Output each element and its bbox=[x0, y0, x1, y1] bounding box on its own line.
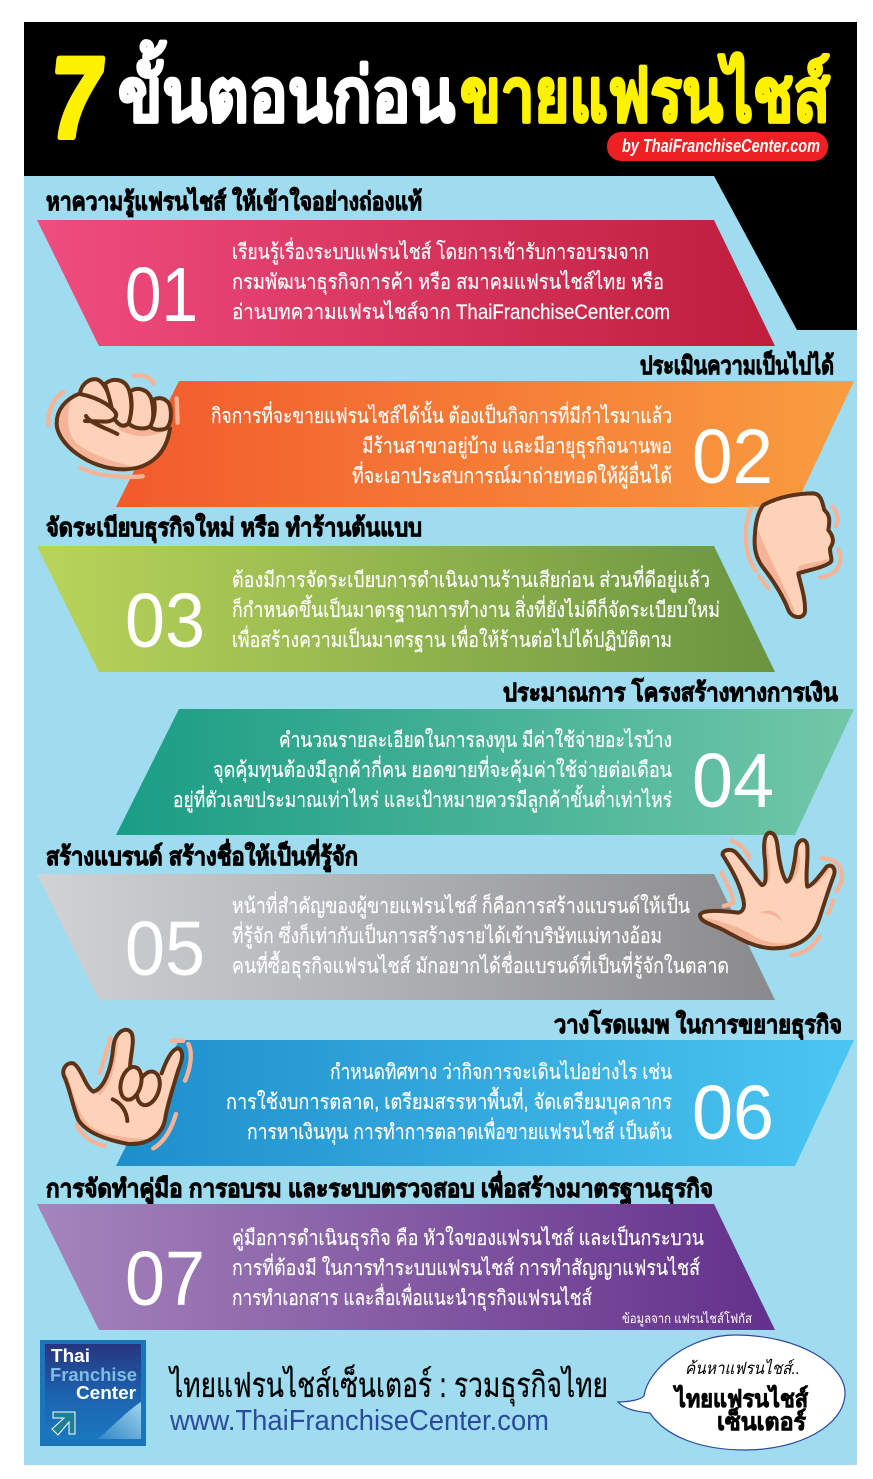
footer url: www.ThaiFranchiseCenter.com bbox=[169, 1405, 549, 1437]
panel: step 01: 01 bbox=[125, 252, 198, 338]
panel: step 01: กรมพัฒนาธุรกิจการค้า หรือ สมาคมแฟรนไชส์ไทย หรือ bbox=[232, 270, 664, 295]
speech bubble: ค้นหาแฟรนไชส์.. bbox=[685, 1358, 800, 1378]
panel: step 06: กำหนดทิศทาง ว่ากิจการจะเดินไปอย่างไร เช่น bbox=[330, 1060, 672, 1084]
logo: Franchise bbox=[50, 1365, 137, 1385]
speech bubble: เซ็นเตอร์ bbox=[717, 1407, 806, 1436]
black title panel bbox=[24, 22, 857, 330]
panel: step 05 bbox=[37, 874, 775, 1000]
speech bubble: ไทยแฟรนไชส์ bbox=[672, 1384, 808, 1413]
panel: step 03: ก็กำหนดขึ้นเป็นมาตรฐานการทำงาน สิ่งที่ยังไม่ดีก็จัดระเบียบใหม่ bbox=[232, 595, 720, 622]
icon: open hand bbox=[700, 833, 842, 955]
panel: step 05: หน้าที่สำคัญของผู้ขายแฟรนไชส์ ก็คือการสร้างแบรนด์ให้เป็น bbox=[232, 891, 690, 919]
heading 4: ประมาณการ โครงสร้างทางการเงิน bbox=[503, 677, 838, 707]
panel: step 07: คู่มือการดำเนินธุรกิจ คือ หัวใจของแฟรนไชส์ และเป็นกระบวน bbox=[232, 1224, 704, 1251]
panel: step 04: คำนวณรายละเอียดในการลงทุน มีค่าใช้จ่ายอะไรบ้าง bbox=[279, 728, 672, 753]
title: 7 bbox=[44, 35, 109, 162]
panel: step 06: การใช้งบการตลาด, เตรียมสรรหาพื้นที่, จัดเตรียมบุคลากร bbox=[226, 1087, 672, 1115]
panel: step 02: 02 bbox=[692, 414, 773, 500]
panel: step 02 bbox=[116, 381, 854, 507]
panel: step 07 bbox=[37, 1204, 775, 1330]
panel: step 06 bbox=[116, 1040, 854, 1166]
panel: step 04: อยู่ที่ตัวเลขประมาณเท่าไหร่ และเป้าหมายควรมีลูกค้าขั้นต่ำเท่าไหร่ bbox=[173, 785, 672, 813]
heading 7: การจัดทำคู่มือ การอบรม และระบบตรวจสอบ เพื่อสร้างมาตรฐานธุรกิจ bbox=[46, 1171, 713, 1205]
logo: Center bbox=[76, 1383, 136, 1403]
panel: step 01 bbox=[37, 220, 775, 346]
heading 5: สร้างแบรนด์ สร้างชื่อให้เป็นที่รู้จัก bbox=[46, 839, 358, 873]
panel: step 02: ที่จะเอาประสบการณ์มาถ่ายทอดให้ผู้อื่นได้ bbox=[352, 461, 672, 489]
panel: step 07: การทำเอกสาร และสื่อเพื่อแนะนำธุรกิจแฟรนไชส์ bbox=[232, 1283, 592, 1311]
footer company name: ไทยแฟรนไชส์เซ็นเตอร์ : รวมธุรกิจไทย bbox=[168, 1364, 608, 1406]
panel: step 07: 07 bbox=[125, 1236, 205, 1322]
title: ขั้นตอนก่อน bbox=[118, 40, 455, 137]
panel: step 04 bbox=[116, 709, 854, 835]
panel: step 04: 04 bbox=[692, 738, 774, 824]
heading 3: จัดระเบียบธุรกิจใหม่ หรือ ทำร้านต้นแบบ bbox=[46, 512, 422, 544]
panel: step 03: เพื่อสร้างความเป็นมาตรฐาน เพื่อให้ร้านต่อไปได้ปฏิบัติตาม bbox=[232, 625, 672, 652]
panel: step 03 bbox=[37, 546, 775, 672]
panel: step 05: คนที่ซื้อธุรกิจแฟรนไชส์ มักอยากได้ชื่อแบรนด์ที่เป็นที่รู้จักในตลาด bbox=[232, 951, 729, 979]
speech bubble bbox=[618, 1335, 845, 1450]
panel: step 03: 03 bbox=[125, 578, 205, 664]
panel: step 01: เรียนรู้เรื่องระบบแฟรนไชส์ โดยการเข้ารับการอบรมจาก bbox=[232, 237, 649, 265]
byline pill bbox=[607, 132, 828, 161]
panel: step 07: ข้อมูลจาก แฟรนไชส์โฟกัส bbox=[622, 1311, 752, 1327]
panel: step 05: 05 bbox=[125, 906, 205, 992]
icon: rock hand bbox=[63, 1030, 191, 1148]
panel: step 04: จุดคุ้มทุนต้องมีลูกค้ากี่คน ยอดขายที่จะคุ้มค่าใช้จ่ายต่อเดือน bbox=[213, 755, 672, 783]
panel: step 07: การที่ต้องมี ในการทำระบบแฟรนไชส์ การทำสัญญาแฟรนไชส์ bbox=[232, 1253, 700, 1280]
panel: step 02: กิจการที่จะขายแฟรนไชส์ได้นั้น ต้องเป็นกิจการที่มีกำไรมาแล้ว bbox=[211, 401, 672, 428]
panel: step 06: 06 bbox=[692, 1070, 774, 1156]
panel: step 02: มีร้านสาขาอยู่บ้าง และมีอายุธุรกิจนานพอ bbox=[362, 435, 672, 459]
title bbox=[44, 35, 830, 162]
byline pill: by ThaiFranchiseCenter.com bbox=[622, 136, 820, 156]
panel: step 03: ต้องมีการจัดระเบียบการดำเนินงานร้านเสียก่อน ส่วนที่ดีอยู่แล้ว bbox=[232, 565, 710, 593]
heading 1: หาความรู้แฟรนไชส์ ให้เข้าใจอย่างถ่องแท้ bbox=[46, 186, 422, 218]
panel: step 05: ที่รู้จัก ซึ่งก็เท่ากับเป็นการสร้างรายได้เข้าบริษัทแม่ทางอ้อม bbox=[232, 921, 662, 949]
logo bbox=[40, 1340, 146, 1446]
logo: Thai bbox=[51, 1346, 90, 1366]
icon: fist bbox=[48, 375, 178, 477]
panel: step 06: การหาเงินทุน การทำการตลาดเพื่อขายแฟรนไชส์ เป็นต้น bbox=[247, 1117, 672, 1145]
panel: step 01: อ่านบทความแฟรนไชส์จาก ThaiFranchiseCenter.com bbox=[232, 300, 670, 324]
icon: thumbs down bbox=[746, 493, 840, 617]
